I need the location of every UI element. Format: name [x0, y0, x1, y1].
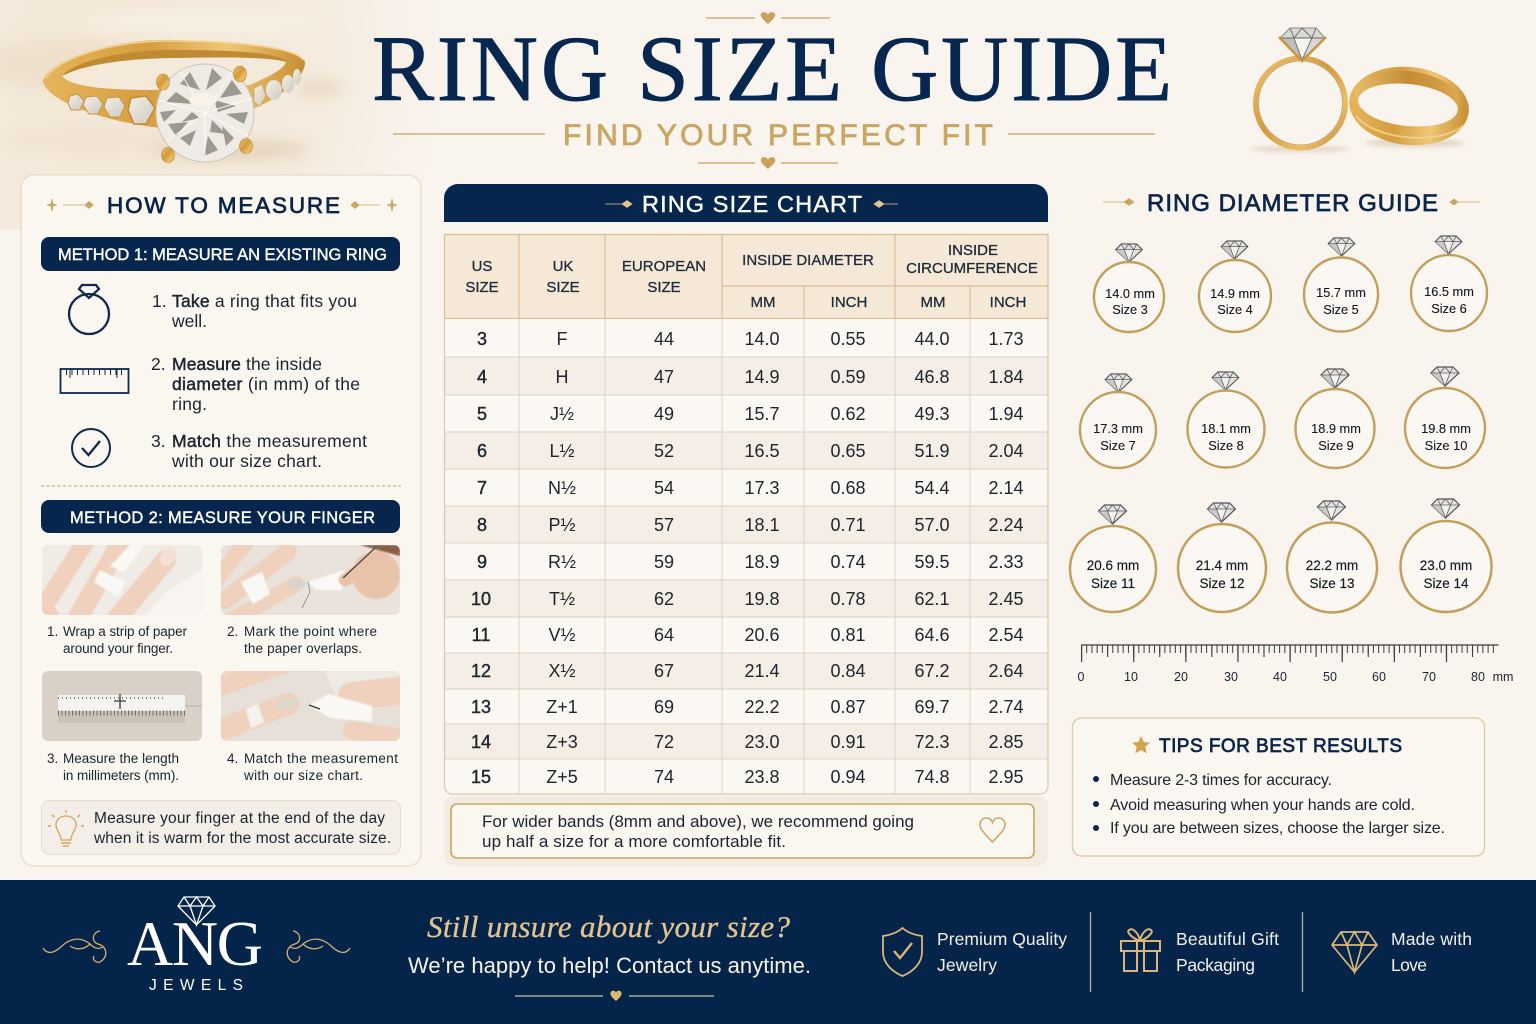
row size 7: 54 [654, 478, 674, 498]
flourish right [287, 931, 350, 962]
ring size 4 [1199, 241, 1271, 332]
banner: method 2 [41, 500, 400, 533]
table header: INSIDE DIAMETER [742, 252, 874, 269]
table header: INSIDE [948, 242, 998, 259]
caption 2: Mark the point where [244, 624, 377, 639]
step 2 text: ring. [172, 394, 207, 414]
ruler scale 0-80 mm: 70 [1422, 670, 1436, 684]
step 1 text [152, 291, 357, 331]
step 2 text [151, 354, 360, 414]
step 2 text: 2. [151, 354, 166, 374]
row size 7: 0.68 [830, 478, 866, 498]
ring size 7: Size 7 [1100, 438, 1136, 453]
row size 6 [477, 441, 1024, 461]
photo: marking the overlap [221, 545, 400, 615]
icon: shield [883, 928, 922, 976]
row size 3: 44 [654, 329, 674, 349]
ring size 3 [1094, 244, 1164, 332]
ring size 5 [1304, 238, 1378, 332]
row size 7: 54.4 [914, 478, 950, 498]
tips list: Avoid measuring when your hands are cold. [1110, 797, 1415, 814]
callout: tip: when it is warm for the most accurate size. [93, 830, 391, 847]
row size 4: 4 [477, 367, 487, 387]
step 3 text: 3. [151, 431, 166, 451]
row size 11: 0.81 [830, 625, 866, 645]
row size 13: 69 [654, 697, 674, 717]
row size 12: 67.2 [914, 661, 950, 681]
row size 14: 72 [654, 732, 674, 752]
row size 15: 74 [654, 767, 674, 787]
icon: gift [1121, 929, 1160, 971]
ring size 8: Size 8 [1208, 438, 1244, 453]
ruler scale 0-80 mm: 20 [1174, 670, 1188, 684]
row size 8: 2.24 [988, 515, 1024, 535]
contact message: We’re happy to help! Contact us anytime. [408, 953, 811, 978]
row size 9: 18.9 [744, 552, 780, 572]
icon: check circle [72, 429, 110, 467]
row size 6: 52 [654, 441, 674, 461]
ruler scale 0-80 mm: 40 [1273, 670, 1287, 684]
row size 12: 21.4 [744, 661, 780, 681]
panel: how to measure [21, 175, 421, 866]
icon: heart outline [980, 818, 1005, 842]
row size 15: 23.8 [744, 767, 780, 787]
row size 7: 17.3 [744, 478, 780, 498]
row size 10 [471, 589, 1024, 609]
row size 15: 2.95 [988, 767, 1024, 787]
ring size 3: 14.0 mm [1105, 286, 1155, 301]
ring size 9: Size 9 [1318, 438, 1354, 453]
ruler scale 0-80 mm: 60 [1372, 670, 1386, 684]
table header: SIZE [465, 279, 499, 296]
row size 5: 1.94 [988, 404, 1024, 424]
callout: tip [42, 800, 400, 854]
callout: tip: Measure your finger at the end of the day [94, 810, 385, 827]
row size 10: T½ [549, 589, 575, 609]
row size 3: 0.55 [830, 329, 866, 349]
row size 14 [471, 732, 1024, 752]
heading: ring diameter guide: RING DIAMETER GUIDE [1147, 190, 1438, 217]
table header [444, 234, 1048, 318]
row size 11: 64.6 [914, 625, 950, 645]
photo: wrapping paper around finger [42, 545, 202, 615]
row size 9: 59 [654, 552, 674, 572]
row size 6: 16.5 [744, 441, 780, 461]
table header: INCH [990, 294, 1026, 311]
row size 3 [477, 329, 1024, 349]
ring size 8: 18.1 mm [1201, 421, 1251, 436]
banner: method 1: METHOD 1: MEASURE AN EXISTING RING [58, 246, 387, 264]
ruler scale 0-80 mm [1078, 645, 1513, 684]
row size 8 [477, 515, 1024, 535]
icon: light bulb [48, 810, 84, 846]
row size 12: 2.64 [988, 661, 1024, 681]
logo: ANG Jewels: JEWELS [149, 977, 243, 994]
banner: method 1 [41, 237, 400, 271]
row size 14: 0.91 [830, 732, 866, 752]
table header: SIZE [647, 279, 681, 296]
photo: measuring strip on ruler [42, 671, 202, 741]
caption 2: the paper overlaps. [244, 641, 362, 656]
title: RING SIZE GUIDE [372, 18, 1172, 121]
row size 5: J½ [550, 404, 574, 424]
ring size 10 [1405, 367, 1485, 468]
row size 3: 14.0 [744, 329, 780, 349]
row size 9: 0.74 [830, 552, 866, 572]
table header: CIRCUMFERENCE [906, 260, 1038, 277]
ring size 14 [1400, 499, 1492, 612]
caption 1 [47, 624, 188, 656]
step 2 text: Measure the inside [172, 354, 322, 374]
badge: premium quality [883, 928, 1067, 976]
row size 4: 47 [654, 367, 674, 387]
subtitle: FIND YOUR PERFECT FIT [563, 119, 993, 152]
photo: matching the measurement [221, 671, 400, 741]
row size 9: R½ [548, 552, 576, 572]
ring size 8 [1188, 372, 1264, 468]
row size 14: 72.3 [914, 732, 950, 752]
logo: ANG Jewels: ANG [127, 908, 263, 979]
table header: MM [920, 294, 946, 311]
row size 4: 46.8 [914, 367, 950, 387]
row size 13: Z+1 [546, 697, 578, 717]
row size 13: 22.2 [744, 697, 780, 717]
caption 3 [47, 751, 179, 783]
row size 5 [477, 404, 1024, 424]
ring size 13 [1287, 501, 1377, 612]
table header: UK [553, 258, 573, 275]
row size 7: N½ [548, 478, 576, 498]
bottom heart ornament [698, 157, 838, 169]
ring diagrams: diameter by size [1070, 236, 1492, 612]
icon: ruler [60, 369, 128, 393]
ring size 14: 23.0 mm [1420, 558, 1472, 573]
badge: gift packaging [1121, 929, 1279, 975]
row size 9 [477, 552, 1024, 572]
icon: ring [69, 285, 109, 334]
photo: gold solitaire ring and wedding band [1250, 28, 1473, 152]
caption 1: Wrap a strip of paper [63, 624, 188, 639]
row size 6: 6 [477, 441, 487, 461]
row size 8: 57 [654, 515, 674, 535]
row size 11: 2.54 [988, 625, 1024, 645]
row size 6: 0.65 [830, 441, 866, 461]
heading: how to measure [47, 193, 397, 218]
table header: EUROPEAN [622, 258, 706, 275]
heading bar: ring size chart [444, 184, 1048, 222]
ring size 7: 17.3 mm [1093, 421, 1143, 436]
row size 8: 57.0 [914, 515, 950, 535]
row size 13: 0.87 [830, 697, 866, 717]
row size 11: 20.6 [744, 625, 780, 645]
ruler scale 0-80 mm: 10 [1124, 670, 1138, 684]
ring size 11: 20.6 mm [1087, 558, 1139, 573]
row size 14: 2.85 [988, 732, 1024, 752]
row size 13: 13 [471, 697, 491, 717]
row size 10: 2.45 [988, 589, 1024, 609]
row size 7 [477, 478, 1024, 498]
badge: made with love [1332, 929, 1472, 975]
tips list [1093, 772, 1445, 837]
row size 12 [471, 661, 1024, 681]
row size 3: 1.73 [988, 329, 1024, 349]
row size 5: 0.62 [830, 404, 866, 424]
ring size 5: 15.7 mm [1316, 285, 1366, 300]
ring size 12 [1178, 503, 1266, 612]
ruler scale 0-80 mm: 50 [1323, 670, 1337, 684]
row size 7: 7 [477, 478, 487, 498]
row size 14: 14 [471, 732, 491, 752]
row size 13: 69.7 [914, 697, 950, 717]
contact message [408, 909, 811, 1001]
row size 7: 2.14 [988, 478, 1024, 498]
row size 15 [471, 767, 1024, 787]
flourish left [43, 931, 106, 962]
logo diamond [178, 897, 215, 925]
caption 4: with our size chart. [243, 768, 363, 783]
row size 5: 5 [477, 404, 487, 424]
row size 3: 3 [477, 329, 487, 349]
ring size 10: 19.8 mm [1421, 421, 1471, 436]
logo: ANG Jewels [43, 897, 350, 994]
heading bar: ring size chart: RING SIZE CHART [642, 191, 862, 217]
caption 2 [227, 624, 377, 656]
tips list: If you are between sizes, choose the larger size. [1110, 820, 1445, 837]
table header: SIZE [546, 279, 580, 296]
row size 9: 9 [477, 552, 487, 572]
table header: MM [750, 294, 776, 311]
ring size 9: 18.9 mm [1311, 421, 1361, 436]
row size 6: L½ [549, 441, 575, 461]
row size 6: 2.04 [988, 441, 1024, 461]
row size 8: 8 [477, 515, 487, 535]
row size 9: 2.33 [988, 552, 1024, 572]
ring size 10: Size 10 [1425, 438, 1467, 453]
caption 4: Match the measurement [244, 751, 398, 766]
ring size 3: Size 3 [1112, 302, 1148, 317]
ring size 7 [1080, 374, 1156, 468]
ruler scale 0-80 mm: 0 [1078, 670, 1085, 684]
row size 4: H [556, 367, 568, 387]
row size 8: 18.1 [744, 515, 780, 535]
tips list: Measure 2-3 times for accuracy. [1110, 772, 1332, 789]
ring size 11: Size 11 [1091, 576, 1135, 591]
row size 4: 1.84 [988, 367, 1024, 387]
photo: gold engagement ring on cream surface [0, 0, 450, 230]
row size 11: 11 [472, 625, 490, 645]
caption 2: 2. [227, 624, 238, 639]
step 3 text: Match the measurement [172, 431, 367, 451]
step 1 text: well. [171, 311, 207, 331]
badge: made with love: Love [1391, 955, 1427, 975]
row size 11: 64 [654, 625, 674, 645]
badge: gift packaging: Packaging [1176, 955, 1255, 975]
ring size 6 [1411, 236, 1487, 331]
row size 4: 0.59 [830, 367, 866, 387]
badge: premium quality: Premium Quality [937, 929, 1067, 949]
row size 12: 67 [654, 661, 674, 681]
ring size 5: Size 5 [1323, 302, 1359, 317]
row size 3: 44.0 [914, 329, 950, 349]
row size 8: 0.71 [830, 515, 866, 535]
table header: INCH [831, 294, 867, 311]
step 2 text: diameter (in mm) of the [172, 374, 360, 394]
table header: US [472, 258, 492, 275]
table: ring size chart [444, 234, 1048, 794]
row size 14: 23.0 [744, 732, 780, 752]
caption 1: around your finger. [63, 641, 173, 656]
row size 10: 19.8 [744, 589, 780, 609]
row size 12: X½ [548, 661, 576, 681]
ring size 6: 16.5 mm [1424, 284, 1474, 299]
row size 5: 15.7 [744, 404, 780, 424]
caption 3: in millimeters (mm). [63, 768, 179, 783]
callout: wider bands note: For wider bands (8mm and above), we recommend going [482, 812, 914, 831]
row size 9: 59.5 [914, 552, 950, 572]
row size 12: 0.84 [830, 661, 866, 681]
ring size 6: Size 6 [1431, 301, 1467, 316]
step 3 text [151, 431, 367, 471]
icon: star [1132, 736, 1150, 754]
ring size 12: Size 12 [1199, 576, 1245, 591]
footer band [0, 880, 1536, 1024]
ruler scale 0-80 mm: mm [1493, 670, 1513, 684]
row size 10: 62 [654, 589, 674, 609]
row size 10: 10 [471, 589, 491, 609]
caption 1: 1. [47, 624, 58, 639]
row size 12: 12 [471, 661, 491, 681]
step 1 text: 1. [152, 291, 167, 311]
heading: how to measure: HOW TO MEASURE [107, 193, 340, 218]
caption 3: Measure the length [63, 751, 179, 766]
tips heading: TIPS FOR BEST RESULTS [1159, 736, 1402, 757]
badge: gift packaging: Beautiful Gift [1176, 929, 1279, 949]
row size 11 [472, 625, 1024, 645]
ring size 13: 22.2 mm [1306, 558, 1358, 573]
row size 6: 51.9 [914, 441, 950, 461]
step 3 text: with our size chart. [171, 451, 322, 471]
step 1 text: Take a ring that fits you [172, 291, 357, 311]
row size 8: P½ [548, 515, 576, 535]
row size 4: 14.9 [744, 367, 780, 387]
callout: wider bands note: up half a size for a more comfortable fit. [482, 832, 786, 851]
row size 10: 62.1 [914, 589, 950, 609]
icon: diamond [1332, 932, 1377, 972]
row size 5: 49 [654, 404, 674, 424]
ring size 11 [1070, 505, 1156, 612]
row size 4 [477, 367, 1024, 387]
row size 14: Z+3 [546, 732, 578, 752]
top heart ornament [706, 12, 830, 24]
badge: premium quality: Jewelry [937, 955, 997, 975]
row size 13 [471, 697, 1024, 717]
caption 3: 3. [47, 751, 58, 766]
row size 15: Z+5 [546, 767, 578, 787]
ring size 9 [1296, 369, 1374, 468]
ring size 13: Size 13 [1309, 576, 1355, 591]
row size 3: F [556, 329, 568, 349]
ring size 12: 21.4 mm [1196, 558, 1248, 573]
callout: wider bands note [444, 796, 1048, 866]
row size 15: 15 [471, 767, 491, 787]
banner: method 2: METHOD 2: MEASURE YOUR FINGER [70, 509, 375, 527]
ruler scale 0-80 mm: 30 [1224, 670, 1238, 684]
badge: made with love: Made with [1391, 929, 1472, 949]
row size 15: 74.8 [914, 767, 950, 787]
ring size 4: 14.9 mm [1210, 286, 1260, 301]
caption 4: 4. [227, 751, 238, 766]
row size 13: 2.74 [988, 697, 1024, 717]
ring size 14: Size 14 [1423, 576, 1469, 591]
caption 4 [227, 751, 398, 783]
row size 15: 0.94 [830, 767, 866, 787]
contact message: Still unsure about your size? [427, 909, 790, 944]
ruler scale 0-80 mm: 80 [1471, 670, 1485, 684]
ring size 4: Size 4 [1217, 302, 1253, 317]
panel: tips for best results [1072, 718, 1484, 856]
row size 10: 0.78 [830, 589, 866, 609]
row size 11: V½ [548, 625, 576, 645]
row size 5: 49.3 [914, 404, 950, 424]
